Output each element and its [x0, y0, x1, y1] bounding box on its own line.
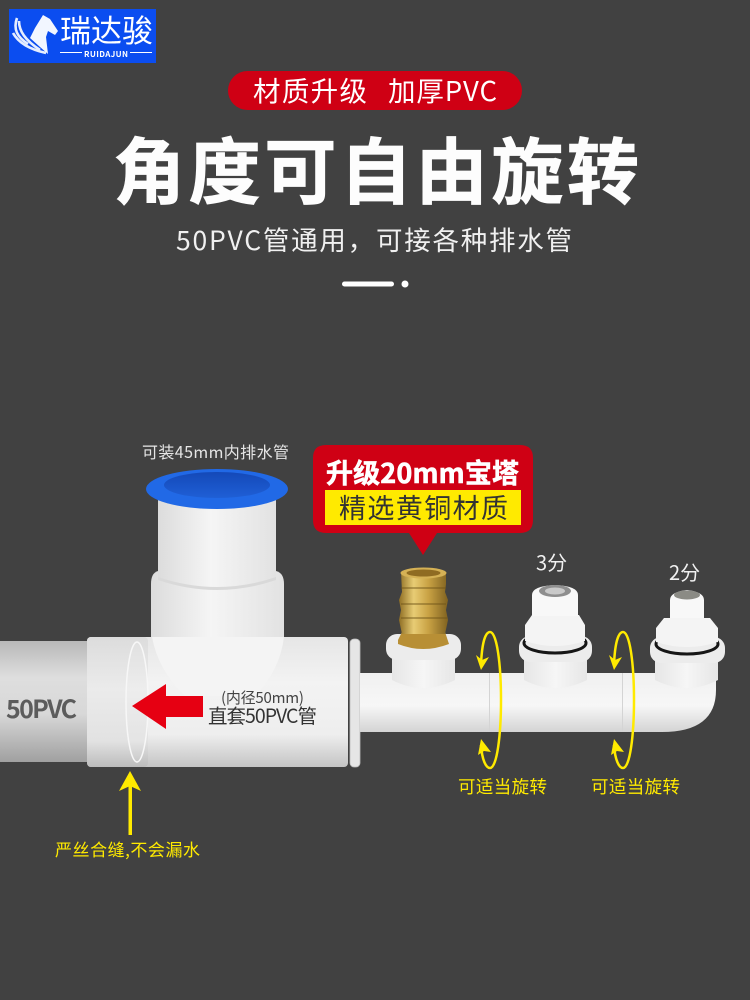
- logo: [9, 6, 156, 63]
- red arrow: [132, 684, 203, 729]
- label: fits 45mm drain: 可装45mm内排水管: [142, 439, 289, 463]
- yellow seam arrow: [119, 771, 141, 835]
- label: 3 fen: 3分: [536, 547, 567, 576]
- left 50PVC pipe: [0, 641, 90, 762]
- title: 角度可自由旋转: [113, 114, 639, 219]
- tee pipe assembly: [0, 469, 360, 767]
- blue cap: [146, 469, 288, 509]
- manifold pipe: [360, 568, 725, 732]
- 3-fen connector: [524, 585, 586, 653]
- end collar: [350, 639, 360, 767]
- pipe bottom lip: [158, 570, 276, 590]
- callout: brass upgrade: 精选黄铜材质: [339, 487, 508, 526]
- icon: horse: [13, 15, 58, 54]
- rotate arrow 2: [609, 632, 634, 768]
- callout: brass upgrade: [313, 445, 533, 555]
- badge: material upgrade: 材质升级: [253, 69, 367, 109]
- subtitle: 50PVC管通用，可接各种排水管: [176, 219, 572, 258]
- label: 2 fen: 2分: [669, 557, 700, 586]
- tee sleeve body: [87, 637, 348, 767]
- brass barb fitting: [398, 568, 449, 649]
- logo subtitle: RUIDAJUN: [84, 49, 128, 60]
- socket collars: [386, 634, 461, 660]
- rotate arrow 1: [476, 632, 501, 768]
- label: 50PVC: 50PVC: [6, 690, 77, 726]
- label: tight seam: 严丝合缝,不会漏水: [55, 836, 200, 861]
- label: rotate 2: 可适当旋转: [591, 774, 680, 799]
- callout: brass upgrade: 升级20mm宝塔: [326, 452, 519, 491]
- label: rotate 1: 可适当旋转: [458, 774, 547, 799]
- vertical upper pipe: [158, 495, 276, 587]
- 2-fen connector: [656, 590, 718, 654]
- vertical socket: [151, 571, 284, 642]
- sleeve inner outline: [126, 642, 148, 762]
- label: direct fit: 直套50PVC管: [208, 700, 317, 729]
- badge: material upgrade: [228, 69, 522, 110]
- badge: material upgrade: 加厚PVC: [388, 69, 497, 109]
- socket necks: [392, 650, 455, 688]
- dash and dot marker: [342, 280, 408, 288]
- logo name: 瑞达骏: [60, 6, 153, 51]
- label: inner diameter: (内径50mm): [221, 687, 304, 708]
